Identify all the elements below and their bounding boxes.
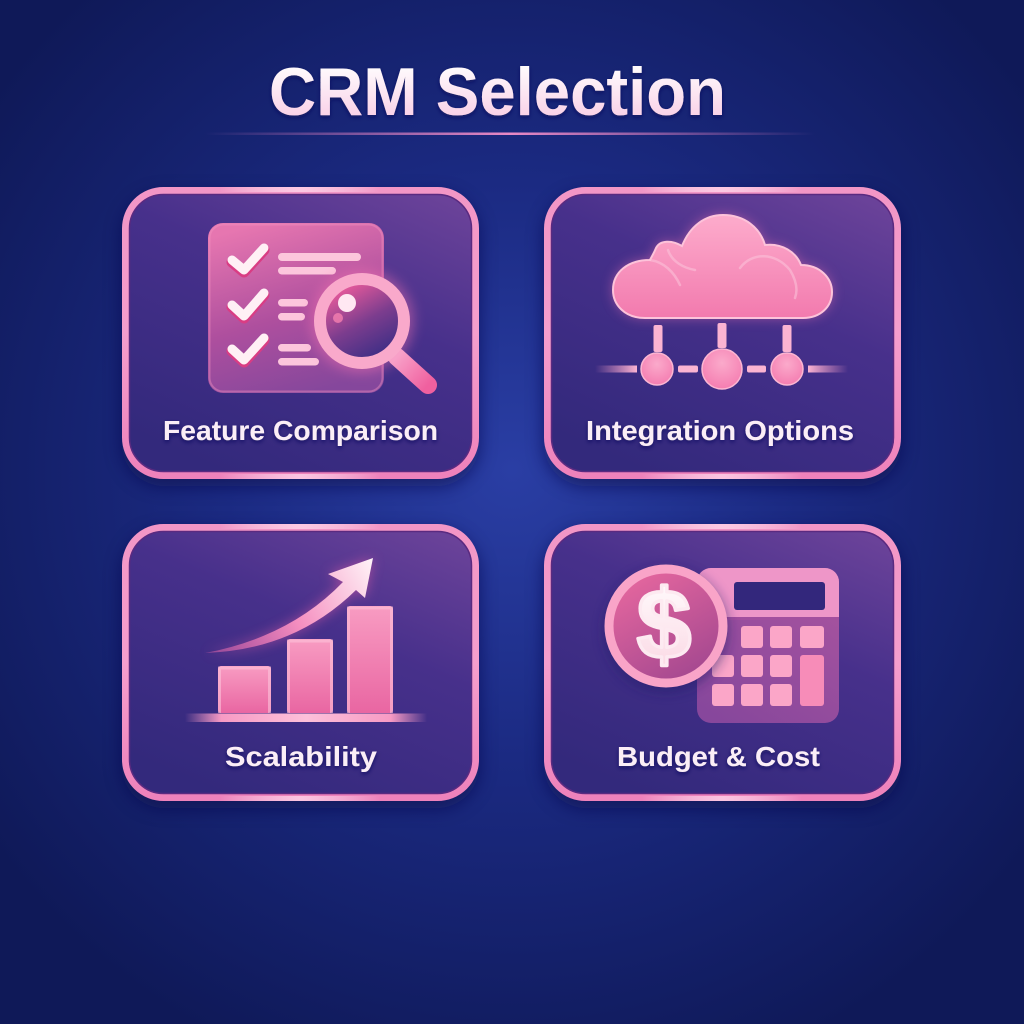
icon: dollar coin: $ bbox=[637, 569, 691, 679]
title: CRM Selection bbox=[269, 54, 726, 130]
icon: calculator bbox=[697, 568, 839, 723]
title underline bbox=[205, 132, 815, 135]
label: scalability: Scalability bbox=[225, 741, 377, 772]
label: feature comparison: Feature Comparison bbox=[163, 415, 438, 446]
panel: feature comparison bbox=[122, 187, 479, 486]
icon: connection nodes bbox=[595, 323, 848, 389]
icon: cloud bbox=[613, 215, 832, 318]
label: budget and cost: Budget & Cost bbox=[617, 741, 820, 772]
icon: growth arrow bbox=[205, 558, 373, 653]
panel: scalability bbox=[122, 524, 479, 808]
bar chart bbox=[185, 606, 427, 722]
icon: dollar coin bbox=[604, 568, 728, 692]
icon: checklist document bbox=[208, 223, 384, 393]
label: integration options: Integration Options bbox=[586, 415, 854, 446]
panel: budget and cost bbox=[544, 524, 901, 808]
panel: integration options bbox=[544, 187, 901, 486]
icon: magnifying glass bbox=[310, 269, 428, 385]
